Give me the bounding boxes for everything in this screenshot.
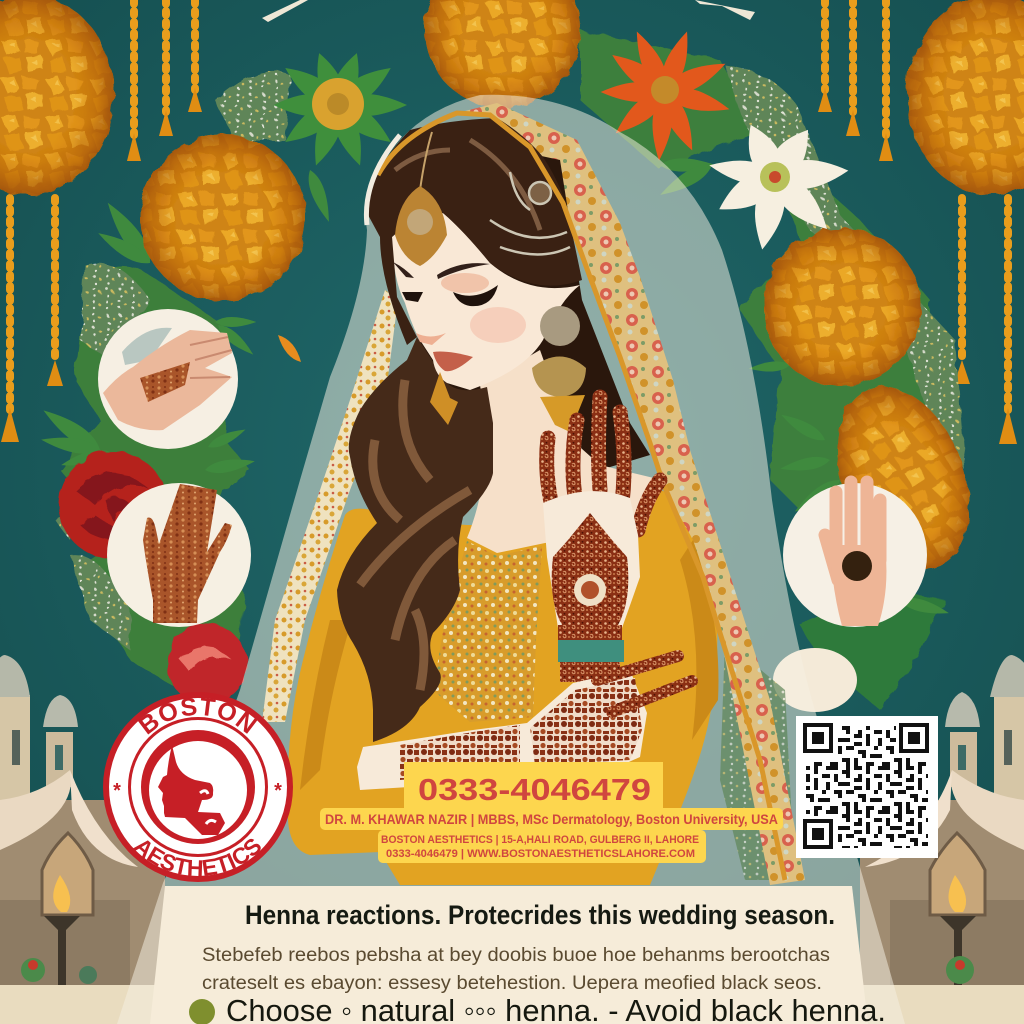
top white beams: [262, 0, 755, 22]
logo stars: *: [274, 780, 282, 802]
hair jewel: [490, 172, 570, 254]
logo badge: [103, 694, 293, 882]
veil white hem: [366, 135, 400, 225]
eyebrows: [393, 262, 490, 279]
phone and contact block: 0333-4046479 | WWW.BOSTONAESTHETICSLAHORE.COM: [386, 848, 695, 860]
marigolds: [0, 0, 1024, 588]
dress: [288, 470, 717, 885]
veil: [117, 95, 905, 1024]
logo face silhouette: [158, 745, 225, 835]
body text: crateselt es ebayon: essesy betehestion. Uepera meofied black seos.: [202, 973, 822, 994]
leaves: [39, 158, 950, 619]
scenery: left palace: [0, 655, 180, 1024]
long hair: [337, 337, 493, 742]
flower: white lily: [707, 119, 850, 252]
body text: [202, 945, 830, 994]
logo stars: *: [113, 780, 121, 802]
circle: full henna hand: [107, 483, 251, 627]
doctor line: [320, 808, 783, 830]
foliage arch: [55, 30, 965, 710]
phone number box: [404, 762, 663, 816]
right border back panel: [457, 103, 805, 885]
phone number: 0333-4046479: [418, 772, 651, 807]
closed eyes: [402, 285, 498, 306]
phone and contact block: DR. M. KHAWAR NAZIR | MBBS, MSc Dermatology, Boston University, USA: [325, 812, 778, 827]
scenery: right palace: [850, 655, 1024, 1024]
bride figure: [117, 95, 905, 1024]
nose: [416, 333, 446, 345]
face: [392, 213, 580, 390]
neck and chest: [467, 350, 662, 553]
maang tikka: [395, 132, 447, 266]
earring right: [532, 306, 586, 432]
phone and contact block: [320, 762, 783, 863]
left border: [262, 290, 398, 722]
blush: [470, 307, 526, 343]
flower: orange: [601, 27, 732, 162]
logo text bottom: AESTHETICS: [133, 838, 261, 876]
dupatta gold rim: [378, 113, 785, 880]
flower: green centre: [274, 49, 407, 169]
phone and contact block: BOSTON AESTHETICS | 15-A,HALI ROAD, GULBERG II, LAHORE: [381, 834, 699, 846]
eyeshadow: [441, 273, 489, 293]
red roses: [59, 451, 247, 704]
white flower behind veil: [773, 648, 857, 712]
logo text top: BOSTON: [138, 698, 258, 734]
heading: Henna reactions. Protecrides this wedding season.: [245, 900, 835, 930]
bottom text panel: [150, 886, 886, 1024]
stray petal: [278, 335, 301, 362]
tip icon: [189, 999, 215, 1024]
top hair: [367, 118, 582, 345]
clinic address box: [378, 830, 706, 863]
earring left: [430, 372, 458, 425]
raised hand with henna: [543, 397, 660, 682]
QR code: [796, 716, 938, 858]
back hair: [420, 130, 650, 470]
circle: rash hand: [98, 309, 238, 449]
hanging garlands: [1, 0, 1017, 444]
circle: small henna spot hand: [783, 482, 927, 627]
lips: [433, 352, 473, 371]
mottled veil lower right: [720, 640, 795, 880]
body text: Stebefeb reebos pebsha at bey doobis buoe hoe behanms berootchas: [202, 945, 830, 966]
forearm with henna: [357, 656, 692, 790]
neckline embroidery: [433, 541, 542, 722]
logo stars: [113, 780, 282, 802]
